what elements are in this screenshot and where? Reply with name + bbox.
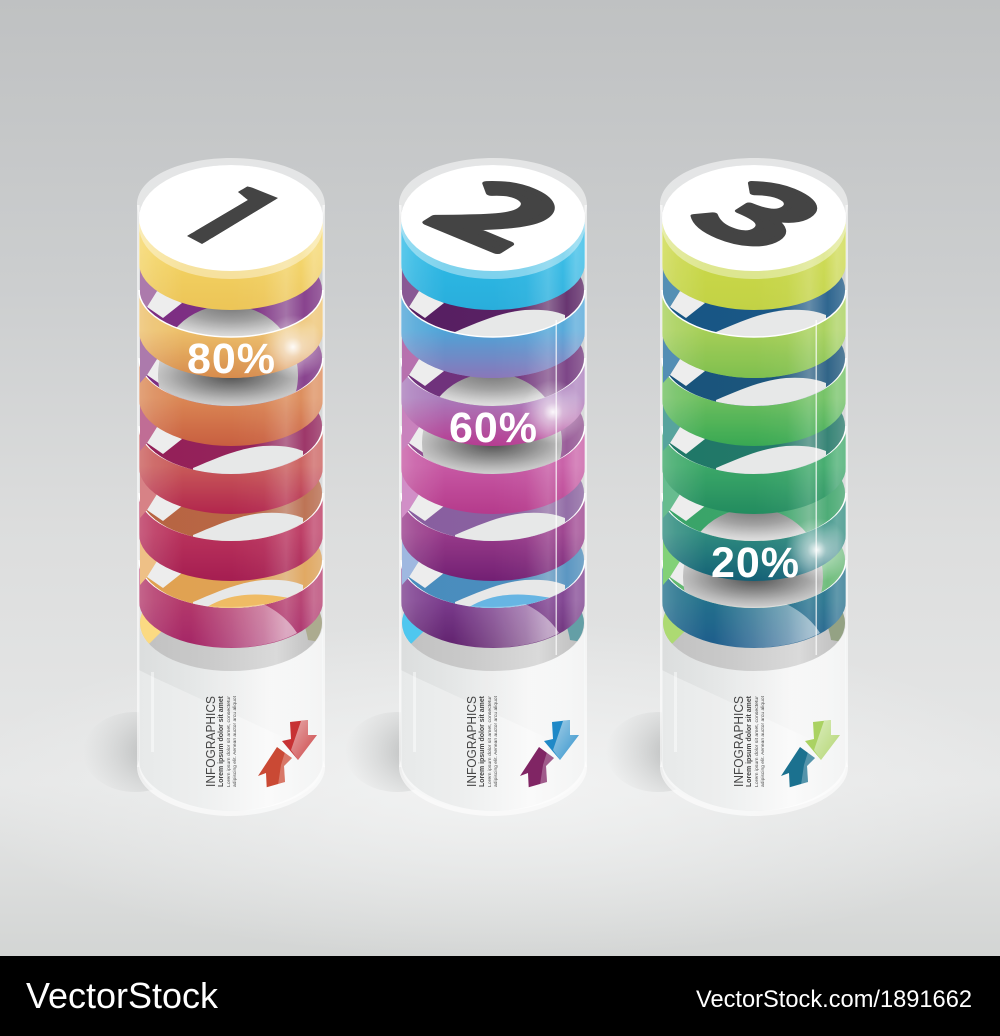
- band 6: [139, 560, 323, 648]
- hole 2 with sphere lower part: [140, 338, 322, 406]
- top lid with lime band 1: [662, 165, 846, 310]
- percent 60: 60%: [449, 404, 537, 452]
- glass sweep 1: [191, 602, 297, 648]
- band 3: [401, 358, 585, 446]
- icon: opposing arrows 3: [781, 720, 840, 787]
- glass line 2: [556, 320, 557, 655]
- caption 3: adipiscing elit. Aenean auctor arcu aliquot: [760, 695, 766, 787]
- lower white body 2: [401, 623, 585, 811]
- number 3: 3: [654, 148, 879, 272]
- caption 3: INFOGRAPHICS: [731, 696, 746, 787]
- band 2: [662, 290, 846, 378]
- band 5: [662, 493, 846, 581]
- caption 1: Lorem ipsum dolor sit amet, consectetur: [226, 696, 232, 787]
- caption 3: Lorem ipsum dolor sit amet, consectetur: [754, 696, 760, 787]
- footer brand: VectorStock: [26, 975, 219, 1016]
- caption 3: Lorem ipsum dolor sit amet: [744, 696, 753, 787]
- cylinder 2: blue to purple, 60%: [360, 158, 587, 816]
- hole 5 with sphere lower part: [663, 540, 845, 608]
- caption 1: adipiscing elit. Aenean auctor arcu aliquot: [232, 695, 238, 787]
- lower white body 1: [139, 623, 323, 811]
- hole 5: [402, 541, 584, 608]
- body diagonal reflection 2: [401, 623, 562, 745]
- interior hole 6: [402, 612, 584, 671]
- caption 2: [464, 695, 499, 787]
- caption 1: INFOGRAPHICS: [203, 696, 218, 787]
- top lid with yellow band 1: [139, 165, 323, 310]
- glass sweep 3: [714, 602, 820, 648]
- icon: opposing arrows 2: [520, 720, 579, 787]
- band 6: [662, 560, 846, 648]
- ground shadow 2: [345, 712, 449, 792]
- glow 2: [521, 380, 585, 444]
- percent 20: 20%: [711, 539, 799, 587]
- hole 3: [662, 376, 846, 486]
- percent 80: 80%: [187, 335, 275, 383]
- caption 3: [731, 695, 766, 787]
- re-draw band 2 over hole: [401, 290, 585, 378]
- number 2: 2: [393, 148, 618, 272]
- hole 4: [139, 443, 323, 553]
- glow 1: [261, 315, 325, 379]
- caption 2: Lorem ipsum dolor sit amet: [477, 696, 486, 787]
- glass shell 2: [399, 158, 587, 816]
- footer image id: VectorStock.com/1891662: [696, 986, 972, 1013]
- caption 2: INFOGRAPHICS: [464, 696, 479, 787]
- ground shadow 3: [606, 712, 710, 792]
- hole 4: [401, 443, 585, 553]
- interior hole 6: [663, 613, 845, 671]
- band 2: [401, 290, 585, 378]
- hole 5: [140, 540, 322, 608]
- number 1: 1: [124, 149, 349, 273]
- band 4: [139, 426, 323, 514]
- band 6: [401, 560, 585, 648]
- hole 3 with sphere lower part: [402, 406, 584, 474]
- hole 1 with sphere upper part: [140, 270, 322, 336]
- body diagonal reflection 3: [662, 623, 823, 745]
- body diagonal reflection 1: [139, 623, 300, 745]
- band 5: [401, 493, 585, 581]
- caption 2: Lorem ipsum dolor sit amet, consectetur: [487, 696, 493, 787]
- footer bar: [0, 956, 1000, 1036]
- hole 1: [401, 240, 585, 350]
- caption 2: adipiscing elit. Aenean auctor arcu aliquot: [493, 695, 499, 787]
- glow 3: [785, 518, 849, 582]
- hole 1: [662, 240, 846, 350]
- interior hole 6: [140, 613, 322, 671]
- hole 4 with sphere upper part: [663, 474, 845, 541]
- band 2: [139, 290, 323, 378]
- cylinder 1: yellow to crimson, 80%: [100, 158, 325, 816]
- re-draw band 2 over hole: [662, 290, 846, 378]
- band 5: [139, 493, 323, 581]
- cylinder 3: lime to blue, 20%: [621, 158, 848, 816]
- band 4: [662, 426, 846, 514]
- glass sweep 2: [453, 602, 559, 648]
- glass shell 3: [660, 158, 848, 816]
- re-draw band 2 over sphere: [139, 290, 323, 378]
- icon: opposing arrows 1: [258, 720, 317, 787]
- hole 2: [662, 308, 846, 418]
- hole 3: [139, 376, 323, 486]
- band 3: [139, 358, 323, 446]
- ground shadow 1: [83, 712, 187, 792]
- band 4: [401, 426, 585, 514]
- band 3: [662, 358, 846, 446]
- glass line 3: [816, 320, 817, 655]
- glass shell 1: [137, 158, 325, 816]
- lower white body 3: [662, 623, 846, 811]
- hole 2 with sphere upper part: [402, 338, 584, 406]
- top lid with blue band 1: [401, 165, 585, 310]
- caption 1: [203, 695, 238, 787]
- caption 1: Lorem ipsum dolor sit amet: [216, 696, 225, 787]
